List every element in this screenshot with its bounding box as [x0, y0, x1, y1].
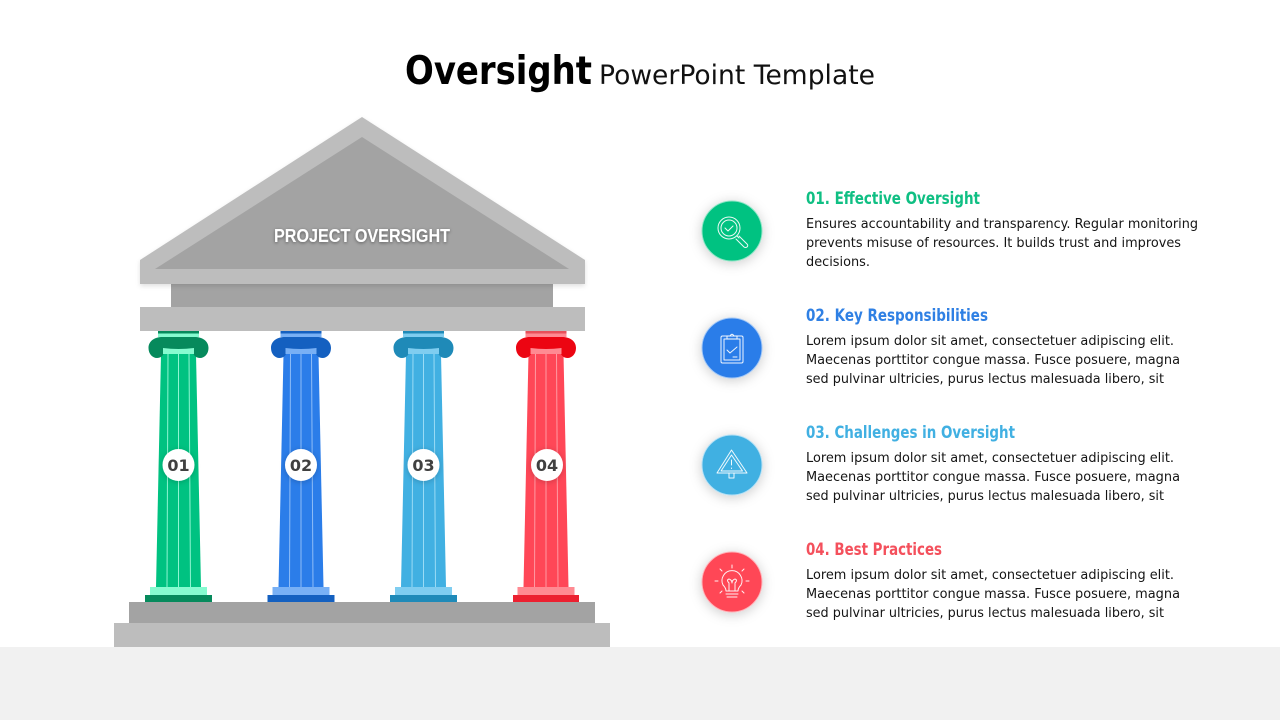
floor band — [0, 647, 1280, 720]
text block 03: 03. Challenges in Oversight — [806, 423, 1015, 442]
text block 04: sed pulvinar ultricies, purus lectus malesuada libero, sit — [806, 605, 1164, 621]
upper step — [129, 602, 595, 623]
number badge 02: 02 — [290, 456, 312, 475]
title — [405, 49, 875, 94]
text block 03 — [806, 423, 1180, 504]
beam — [140, 307, 585, 331]
number badge 01 — [162, 449, 194, 481]
icon: clipboard with check — [702, 318, 762, 378]
number badge 04 — [531, 449, 563, 481]
pediment roof — [140, 117, 585, 284]
title: Oversight — [405, 49, 592, 94]
pediment inner panel — [155, 137, 569, 269]
text block 02: Lorem ipsum dolor sit amet, consectetuer adipiscing elit. — [806, 333, 1174, 349]
text block 03: Maecenas porttitor congue massa. Fusce posuere, magna — [806, 469, 1180, 485]
title: PowerPoint Template — [599, 60, 875, 91]
text block 01: prevents misuse of resources. It builds trust and improves — [806, 235, 1181, 251]
text block 01: 01. Effective Oversight — [806, 189, 980, 208]
number badge 04: 04 — [536, 456, 558, 475]
text block 03: sed pulvinar ultricies, purus lectus malesuada libero, sit — [806, 488, 1164, 504]
icon: light bulb — [702, 552, 762, 612]
temple building — [114, 117, 610, 647]
text block 01: decisions. — [806, 254, 870, 270]
text block 02: sed pulvinar ultricies, purus lectus malesuada libero, sit — [806, 371, 1164, 387]
text block 01: Ensures accountability and transparency. Regular monitoring — [806, 216, 1198, 232]
number badge 03: 03 — [412, 456, 435, 475]
column 03 sky blue — [390, 331, 457, 602]
text block 04 — [806, 540, 1180, 621]
icon: magnifier with check — [702, 201, 762, 261]
icon: warning triangle — [702, 435, 762, 495]
frieze — [171, 284, 553, 307]
column 01 green — [145, 331, 212, 602]
text block 01 — [806, 189, 1198, 270]
number badge 02 — [285, 449, 317, 481]
number badge 03 — [408, 449, 440, 481]
text block 04: Lorem ipsum dolor sit amet, consectetuer adipiscing elit. — [806, 567, 1174, 583]
lower step — [114, 623, 610, 647]
number badge 01: 01 — [167, 456, 190, 475]
text block 04: 04. Best Practices — [806, 540, 942, 559]
pediment label: PROJECT OVERSIGHT — [274, 226, 450, 246]
text block 03: Lorem ipsum dolor sit amet, consectetuer adipiscing elit. — [806, 450, 1174, 466]
column 02 blue — [268, 331, 334, 602]
text block 02 — [806, 306, 1180, 387]
column 04 red — [513, 331, 579, 602]
text block 02: 02. Key Responsibilities — [806, 306, 988, 325]
text block 04: Maecenas porttitor congue massa. Fusce posuere, magna — [806, 586, 1180, 602]
text block 02: Maecenas porttitor congue massa. Fusce posuere, magna — [806, 352, 1180, 368]
